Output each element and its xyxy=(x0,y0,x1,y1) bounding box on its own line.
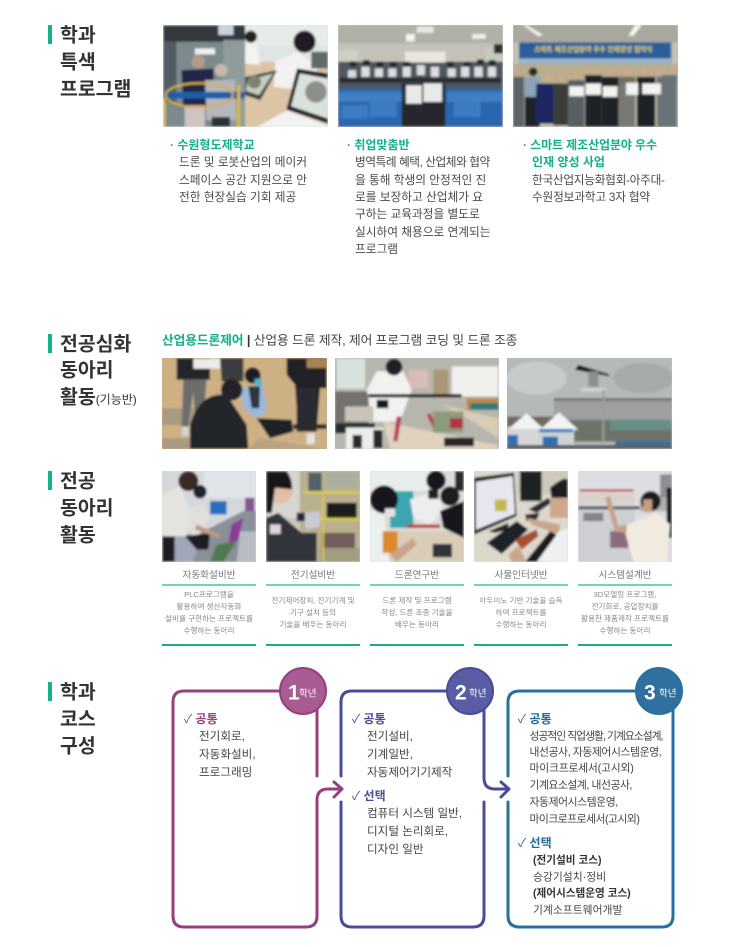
heading: 학과 특색 프로그램: 특색 xyxy=(60,51,96,73)
text: 스마트 제조산업분야 우수 인재 양성 사업: 인재 양성 사업 xyxy=(532,155,605,169)
text: 3학년 선택: (전기설비 코스) xyxy=(533,854,601,866)
text: 1학년 공통: ✓ 공통 xyxy=(184,712,218,726)
heading: 전공 동아리 활동 xyxy=(48,470,114,546)
badge: 3학년: 3 xyxy=(644,682,656,704)
section: 전공심화 동아리 활동 xyxy=(48,333,672,449)
club: 드론연구반: 작성, 드론 조종 기술을 xyxy=(381,608,453,617)
text: 취업맞춤반: 구하는 교육과정을 별도로 xyxy=(355,208,480,221)
badge: 2학년: 2 xyxy=(455,682,467,704)
club: 드론연구반 xyxy=(370,570,464,646)
frame: 3학년 xyxy=(508,691,673,927)
club: 전기설비반 xyxy=(266,570,360,646)
text: 3학년 공통: ✓ 공통 xyxy=(518,712,552,726)
course flow frames and arrows xyxy=(172,690,674,928)
club: 사물인터넷반: 수행하는 동아리 xyxy=(495,620,546,629)
club: 사물인터넷반: 아두이노 기반 기술을 습득 xyxy=(479,596,563,605)
club: 자동화설비반 xyxy=(162,570,256,646)
photo: 취업맞춤반 단체 사진 xyxy=(338,25,503,127)
photo: 인재 양성 협약식: 스마트 제조산업분야 우수 인재양성 협약식 xyxy=(534,44,652,53)
heading: 전공 동아리 활동: 활동 xyxy=(60,524,96,546)
heading: 학과 코스 구성 xyxy=(48,681,96,757)
text: 2학년 선택: ✓ 선택 xyxy=(352,789,386,803)
photo: 시스템설계반 xyxy=(578,471,672,562)
club: 시스템설계반 xyxy=(578,570,672,646)
text: 취업맞춤반 xyxy=(347,138,491,256)
section: 학과 특색 프로그램 xyxy=(48,24,678,256)
text: 취업맞춤반: · 취업맞춤반 xyxy=(347,138,410,152)
text: 취업맞춤반: 병역특례 혜택, 산업체와 협약 xyxy=(355,156,490,169)
heading: 학과 코스 구성: 학과 xyxy=(60,681,96,703)
text: 수원형도제학교: 전한 현장실습 기회 제공 xyxy=(179,191,296,204)
text: 수원형도제학교: · 수원형도제학교 xyxy=(170,138,255,152)
text: 3학년 선택: 승강기설치·정비 xyxy=(533,871,606,883)
badge: 3학년 xyxy=(635,667,683,715)
text: 2학년 공통 xyxy=(352,712,452,779)
text: 스마트 제조산업분야 우수 인재 양성 사업: 수원정보과학고 3자 협약 xyxy=(532,191,650,204)
text: 스마트 제조산업분야 우수 인재 양성 사업 xyxy=(523,138,665,204)
badge: 3학년: 학년 xyxy=(659,688,676,699)
section: 전공 동아리 활동 xyxy=(48,470,672,646)
text: 2학년 공통: 전기설비, xyxy=(367,730,413,743)
badge: 2학년: 학년 xyxy=(469,688,486,699)
heading: 학과 코스 구성: 코스 xyxy=(60,708,96,730)
text: 2학년 선택: 디자인 일반 xyxy=(367,843,424,856)
club: 시스템설계반: 3D모델링 프로그램, xyxy=(594,590,656,599)
club: 시스템설계반: 활용한 제품제작 프로젝트를 xyxy=(581,614,669,623)
text: 3학년 공통 xyxy=(518,712,663,825)
text: 스마트 제조산업분야 우수 인재 양성 사업: · 스마트 제조산업분야 우수 xyxy=(523,138,657,152)
section: 학과 코스 구성 xyxy=(48,667,683,928)
text: 취업맞춤반: 실시하여 채용으로 연계되는 xyxy=(355,226,491,239)
club: 전기설비반: 기구 설치 등의 xyxy=(290,608,336,617)
heading: 학과 특색 프로그램 xyxy=(48,24,131,100)
club: 자동화설비반: 설비를 구현하는 프로젝트를 xyxy=(165,614,253,623)
heading: 학과 코스 구성: 구성 xyxy=(60,735,96,757)
photo: 드론연구반 xyxy=(370,471,464,562)
text: 2학년 공통: 기계일반, xyxy=(367,748,413,761)
heading: 학과 특색 프로그램: 학과 xyxy=(60,24,96,46)
club: 드론연구반: 드론연구반 xyxy=(395,570,439,581)
text: 1학년 공통: 전기회로, xyxy=(199,730,245,743)
text: 2학년 공통: ✓ 공통 xyxy=(352,712,386,726)
text: 3학년 공통: 기계요소설계, 내선공사, xyxy=(530,780,632,792)
heading: 전공심화 동아리 활동(기능반) xyxy=(48,333,137,408)
text: 2학년 선택: 컴퓨터 시스템 일반, xyxy=(367,807,462,820)
text: 3학년 공통: 내선공사, 자동제어시스템운영, xyxy=(530,747,661,759)
club: 사물인터넷반: 하여 프로젝트를 xyxy=(495,608,546,617)
text: 2학년 공통: 자동제어기기제작 xyxy=(367,766,452,779)
arrow: 1학년에서 2학년 xyxy=(334,782,342,797)
club: 시스템설계반: 수행하는 동아리 xyxy=(599,626,650,635)
club: 시스템설계반: 시스템설계반 xyxy=(599,570,651,581)
club: 사물인터넷반 xyxy=(474,570,568,646)
heading: 전공심화 동아리 활동(기능반): 동아리 xyxy=(60,359,114,381)
text: 3학년 공통: 마이크로프로세서(고시외) xyxy=(530,813,639,825)
heading: 전공 동아리 활동: 전공 xyxy=(60,470,96,492)
text: 3학년 선택: 기계소프트웨어개발 xyxy=(533,904,622,916)
subtitle: 산업용드론제어: 산업용드론제어 | 산업용 드론 제작, 제어 프로그램 코딩 및 드론 조종 xyxy=(162,333,517,348)
club: 드론연구반: 배우는 동아리 xyxy=(395,620,439,629)
frame: 2학년 xyxy=(341,691,508,927)
text: 1학년 공통 xyxy=(184,712,256,779)
photo: 드론 메이커 스페이스 실습 xyxy=(163,25,328,127)
text: 1학년 공통: 자동화설비, xyxy=(199,748,256,761)
badge: 2학년 xyxy=(446,667,494,715)
text: 3학년 공통: 자동제어시스템운영, xyxy=(530,797,618,809)
photo: 사물인터넷반 xyxy=(474,471,568,562)
club: 자동화설비반: 수행하는 동아리 xyxy=(183,626,234,635)
text: 2학년 선택: 디지털 논리회로, xyxy=(367,825,448,838)
text: 취업맞춤반: 프로그램 xyxy=(355,243,398,256)
club: 시스템설계반: 전기회로, 공압장치를 xyxy=(591,602,659,611)
heading: 전공심화 동아리 활동(기능반): 전공심화 xyxy=(60,333,131,355)
club: 드론연구반: 드론 제작 및 프로그램 xyxy=(382,596,452,605)
club: 사물인터넷반: 사물인터넷반 xyxy=(495,570,547,581)
text: 수원형도제학교: 스페이스 공간 지원으로 안 xyxy=(179,174,307,187)
heading: 학과 특색 프로그램: 프로그램 xyxy=(60,78,131,100)
text: 취업맞춤반: 로를 보장하고 산업체가 요 xyxy=(355,191,483,204)
text: 수원형도제학교 xyxy=(170,138,307,204)
photo: 실내 드론 제작 xyxy=(335,358,499,449)
text: 취업맞춤반: 을 통해 학생의 안정적인 진 xyxy=(355,174,486,187)
photo: 야외 드론 비행 xyxy=(507,358,672,449)
text: 스마트 제조산업분야 우수 인재 양성 사업: 한국산업지능화협회-아주대- xyxy=(532,174,665,187)
photo: 자동화설비반 xyxy=(162,471,256,562)
text: 3학년 공통: 마이크프로세서(고시외) xyxy=(530,763,634,775)
club: 전기설비반: 전기설비반 xyxy=(291,570,335,581)
text: 3학년 공통: 성공적인 직업생활, 기계요소설계, xyxy=(530,730,663,742)
text: 3학년 선택: (제어시스템운영 코스) xyxy=(533,887,631,899)
photo: 운동장 드론 조립 xyxy=(162,358,327,449)
photo: 전기설비반 xyxy=(266,471,360,562)
club: 자동화설비반: 자동화설비반 xyxy=(183,570,235,581)
club: 전기설비반: 기술을 배우는 동아리 xyxy=(279,620,347,629)
text: 1학년 공통: 프로그래밍 xyxy=(199,766,252,779)
frame: 1학년 xyxy=(173,691,340,927)
photo: 인재 양성 협약식 xyxy=(513,25,678,127)
text: 2학년 선택 xyxy=(352,789,462,856)
heading: 전공심화 동아리 활동(기능반): 활동(기능반) xyxy=(60,386,137,408)
text: 수원형도제학교: 드론 및 로봇산업의 메이커 xyxy=(179,156,307,169)
arrow: 2학년에서 3학년 xyxy=(501,782,509,797)
club: 전기설비반: 전기제어장치, 전기기계 및 xyxy=(271,596,355,605)
heading: 전공 동아리 활동: 동아리 xyxy=(60,497,114,519)
club: 자동화설비반: 활용하여 생산자동화 xyxy=(176,602,242,611)
badge: 1학년: 학년 xyxy=(299,688,316,699)
badge: 1학년 xyxy=(279,667,327,715)
text: 3학년 선택: ✓ 선택 xyxy=(518,836,552,850)
club: 자동화설비반: PLC프로그램을 xyxy=(184,590,234,599)
text: 3학년 선택 xyxy=(518,836,631,916)
badge: 1학년: 1 xyxy=(288,682,300,704)
